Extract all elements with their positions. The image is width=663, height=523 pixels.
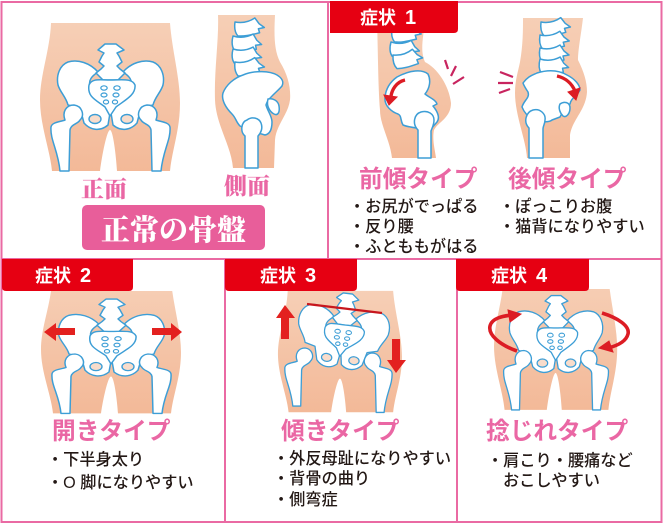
- text: open type symptoms: ・O 脚になりやすい: [47, 474, 194, 492]
- tag: symptom 1: [330, 1, 458, 33]
- heading: twisted type: 捻じれタイプ: [486, 418, 628, 445]
- arrow: pelvis opens left: [44, 323, 75, 341]
- text: tilted type symptoms: [273, 450, 451, 509]
- arrow: rotation left: [490, 310, 521, 351]
- tag: symptom 3: 症状 3: [260, 265, 316, 287]
- text: tilted type symptoms: ・背骨の曲り: [273, 470, 370, 488]
- illustration: front view of normal pelvis: [40, 23, 180, 171]
- panel: symptom 4: [456, 259, 633, 490]
- heading: normal pelvis: 正常の骨盤: [101, 213, 246, 247]
- label: side view: 側面: [224, 174, 270, 199]
- tag: symptom 1: 症状 1: [360, 7, 416, 29]
- text: twisted type symptoms: おこしやすい: [503, 472, 600, 490]
- arrow: backward rotation: [557, 76, 580, 100]
- heading: anterior tilt type: 前傾タイプ: [359, 166, 478, 193]
- illustration: twisted pelvis: [494, 277, 617, 410]
- arrow: pelvis opens right: [152, 323, 182, 341]
- heading: normal pelvis: [82, 205, 265, 250]
- icon: emphasis ticks left: [498, 72, 513, 93]
- text: posterior tilt symptoms: [499, 198, 645, 236]
- illustration: side view of normal pelvis: [215, 15, 290, 168]
- arrow: rotation right: [599, 313, 628, 352]
- arrow: forward rotation: [384, 80, 405, 105]
- text: anterior tilt symptoms: ・反り腰: [349, 218, 414, 236]
- illustration: posterior tilt: [515, 17, 587, 158]
- text: open type symptoms: [47, 451, 194, 492]
- panel: symptom 1: [330, 1, 645, 256]
- arrow: up: [276, 305, 295, 339]
- heading: open type: 開きタイプ: [52, 418, 171, 445]
- tag: symptom 2: 症状 2: [35, 265, 91, 287]
- illustration: anterior tilt: [377, 20, 451, 158]
- text: twisted type symptoms: ・肩こり・腰痛など: [487, 452, 633, 470]
- panel: symptom 2: [2, 259, 194, 492]
- tag: symptom 4: [456, 259, 589, 291]
- text: anterior tilt symptoms: ・お尻がでっぱる: [349, 197, 478, 216]
- tag: symptom 2: [2, 259, 133, 291]
- text: posterior tilt symptoms: ・ぽっこりお腹: [499, 198, 612, 216]
- tag: symptom 4: 症状 4: [491, 265, 548, 287]
- heading: tilted type: 傾きタイプ: [281, 418, 400, 445]
- text: tilted type symptoms: ・外反母趾になりやすい: [273, 450, 451, 468]
- text: posterior tilt symptoms: ・猫背になりやすい: [499, 218, 645, 236]
- heading: posterior tilt type: 後傾タイプ: [508, 166, 627, 193]
- label: front view: 正面: [81, 177, 127, 202]
- arrow: down: [387, 339, 406, 373]
- panel: symptom 3: [225, 259, 451, 509]
- illustration: open pelvis: [41, 280, 181, 413]
- text: twisted type symptoms: [487, 452, 633, 490]
- text: anterior tilt symptoms: ・ふとももがはる: [349, 237, 478, 256]
- text: open type symptoms: ・下半身太り: [47, 451, 144, 469]
- tag: symptom 3: [225, 259, 357, 291]
- text: tilted type symptoms: ・側弯症: [273, 491, 338, 509]
- panel: normal pelvis: [40, 15, 290, 250]
- icon: emphasis ticks right: [445, 60, 464, 84]
- text: anterior tilt symptoms: [349, 197, 478, 256]
- illustration: tilted pelvis: [278, 288, 402, 412]
- line: tilt indicator: [307, 304, 382, 313]
